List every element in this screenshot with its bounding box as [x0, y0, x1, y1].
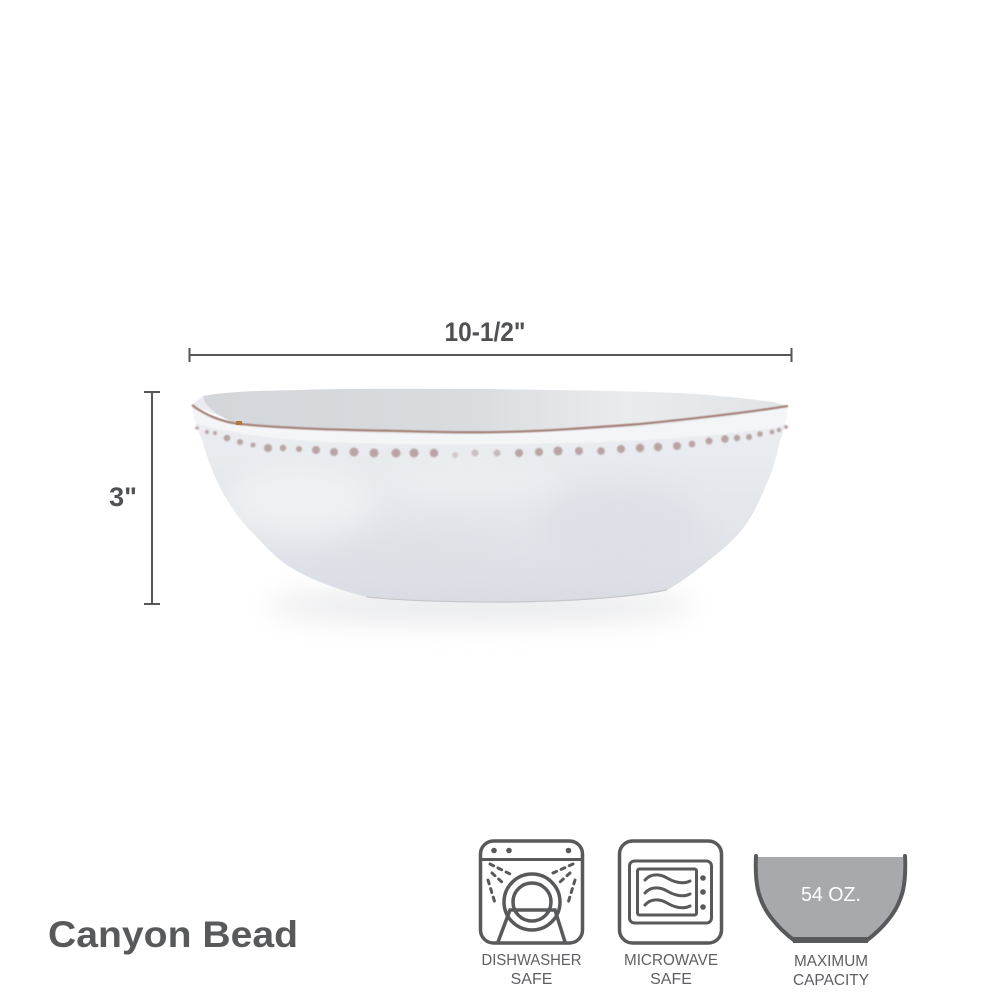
label: dishwasher safe: SAFE	[511, 971, 552, 988]
icon: microwave safe	[620, 841, 722, 943]
label: microwave safe: MICROWAVE	[624, 952, 718, 969]
icon: capacity bowl 54 oz: 54 OZ.	[801, 884, 861, 906]
bowl interior	[203, 389, 788, 432]
bowl base edge	[367, 590, 667, 602]
bowl photograph	[185, 389, 795, 624]
icon: dishwasher safe	[480, 841, 583, 943]
label: maximum capacity: CAPACITY	[793, 972, 869, 989]
product name: Canyon Bead	[48, 914, 298, 955]
label: maximum capacity: MAXIMUM	[794, 953, 868, 970]
icon: capacity bowl 54 oz	[756, 856, 905, 943]
width dimension: 10-1/2 inches: 10-1/2"	[444, 317, 526, 347]
label: dishwasher safe: DISHWASHER	[482, 952, 582, 969]
height dimension: 3 inches: 3"	[109, 482, 137, 512]
pale rim wedge at left	[192, 396, 240, 424]
bowl exterior body	[192, 405, 788, 602]
beaded row	[195, 425, 788, 458]
bowl shadow	[265, 588, 695, 624]
rim band highlight	[194, 415, 786, 444]
label: microwave safe: SAFE	[650, 971, 692, 988]
rust spot on rim	[236, 421, 242, 425]
brown rim edge	[192, 405, 788, 432]
infographic canvas	[50, 322, 908, 985]
soft highlights on body	[194, 415, 786, 528]
